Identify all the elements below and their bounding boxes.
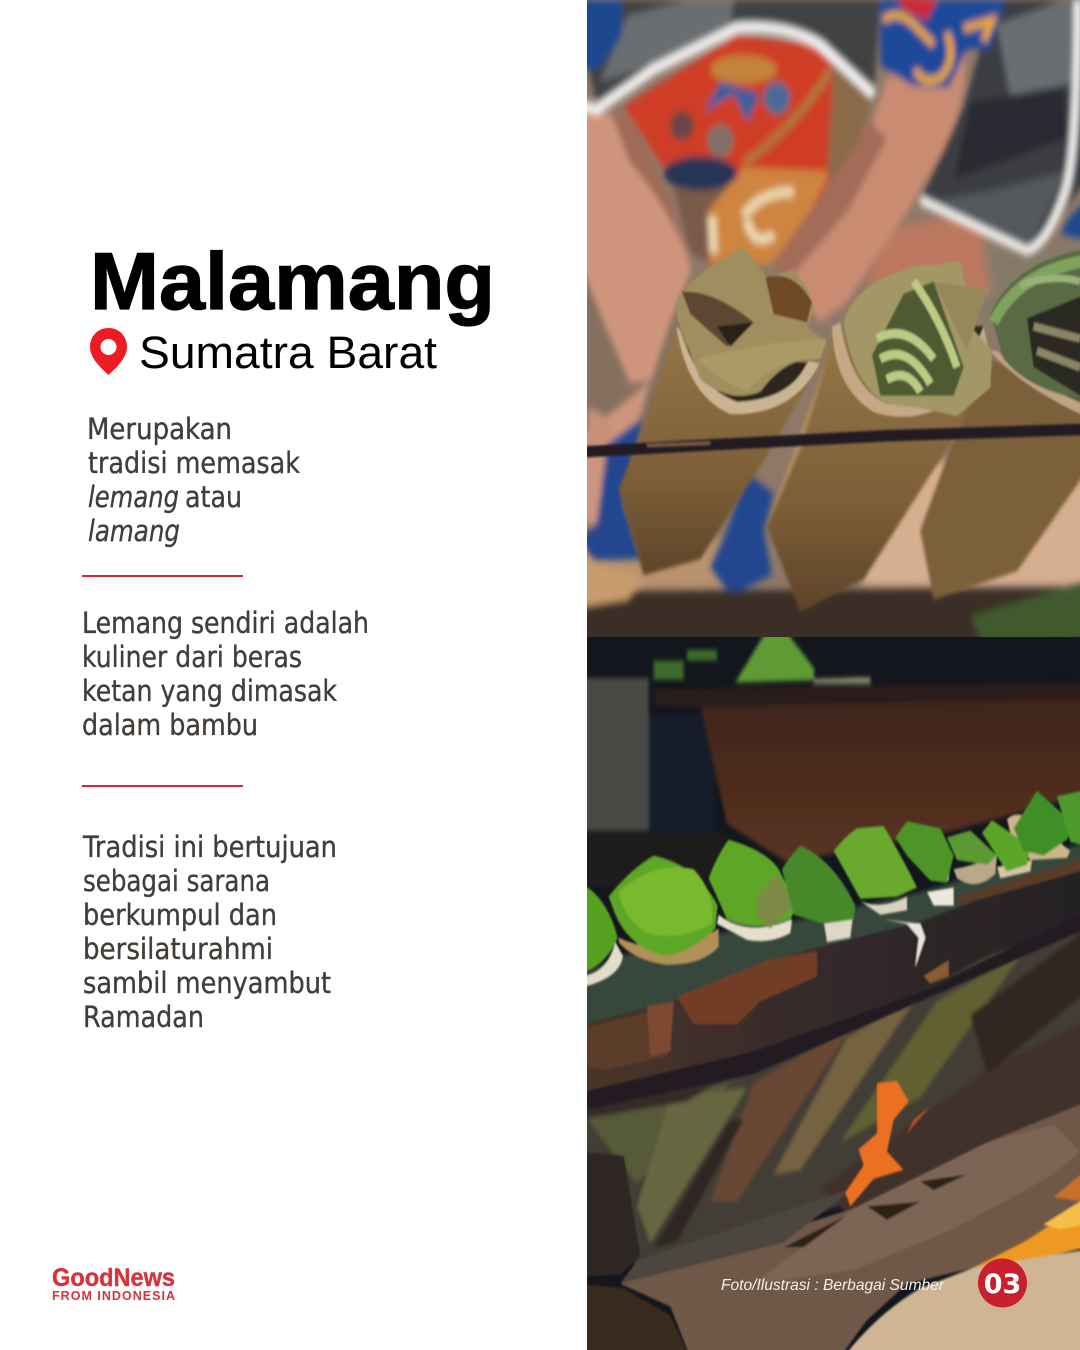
subtitle: location: Sumatra Barat xyxy=(139,327,437,378)
text block: purpose of tradition: bersilaturahmi xyxy=(83,932,273,966)
text block: introduction: lamang xyxy=(88,514,180,548)
top leaves xyxy=(735,632,814,683)
blue patterned sleeve xyxy=(880,0,1005,88)
left leg xyxy=(574,110,690,384)
photo caption: Foto/Ilustrasi : Berbagai Sumber xyxy=(721,1277,945,1294)
text block: purpose of tradition: sambil menyambut xyxy=(83,966,331,1000)
text block: about lemang: kuliner dari beras xyxy=(82,640,302,674)
blue cloth xyxy=(580,416,644,561)
text block: about lemang: ketan yang dimasak xyxy=(82,674,337,708)
leaves xyxy=(587,886,618,972)
shorts xyxy=(624,35,874,265)
text block: introduction: atau xyxy=(185,480,242,514)
right arm xyxy=(774,53,965,322)
text block: purpose of tradition: sebagai sarana xyxy=(83,864,270,898)
pot xyxy=(580,678,649,831)
photo: lemang cooking over fire xyxy=(580,632,1080,1350)
tubes below leaves xyxy=(580,842,1080,1029)
ground xyxy=(587,582,1080,637)
logo: GoodNews from Indonesia xyxy=(52,1264,175,1303)
text block: introduction: lemang xyxy=(88,480,179,514)
wire xyxy=(580,429,1080,452)
text block: purpose of tradition: Tradisi ini bertujuan xyxy=(82,830,337,864)
dark garment xyxy=(574,0,880,106)
tubes xyxy=(619,326,1080,612)
page number badge: 03 xyxy=(984,1269,1021,1300)
icon: location pin xyxy=(90,328,127,375)
text block: introduction: Merupakan xyxy=(87,412,232,446)
text block: about lemang xyxy=(82,606,369,742)
photo: bamboo tubes held by a person xyxy=(574,0,1080,653)
text block: introduction xyxy=(87,412,300,548)
logo: GoodNews from Indonesia: GoodNews xyxy=(52,1264,175,1292)
rims xyxy=(676,326,820,414)
flames xyxy=(845,1081,909,1206)
far rims xyxy=(1007,815,1070,860)
smoky bamboo area xyxy=(587,930,1080,1263)
leaves tube 2 xyxy=(844,261,992,416)
page number badge xyxy=(978,1258,1027,1308)
text block: purpose of tradition: Ramadan xyxy=(83,1000,204,1034)
text block: introduction: tradisi memasak xyxy=(88,446,300,480)
logo: GoodNews from Indonesia: FROM INDONESIA xyxy=(52,1289,175,1303)
leaves tube 1 xyxy=(677,247,826,396)
dark interiors xyxy=(687,347,807,402)
wood xyxy=(620,1102,1080,1350)
text block: about lemang: Lemang sendiri adalah xyxy=(82,606,369,640)
milk drip xyxy=(884,919,925,967)
title: Malamang xyxy=(90,237,495,327)
main log xyxy=(580,858,1080,1097)
text block: about lemang: dalam bambu xyxy=(82,708,258,742)
white hem xyxy=(580,27,874,109)
brown box xyxy=(700,696,1080,862)
leaves tube 3 xyxy=(990,249,1080,400)
text block: purpose of tradition xyxy=(82,830,337,1034)
text block: purpose of tradition: berkumpul dan xyxy=(83,898,277,932)
